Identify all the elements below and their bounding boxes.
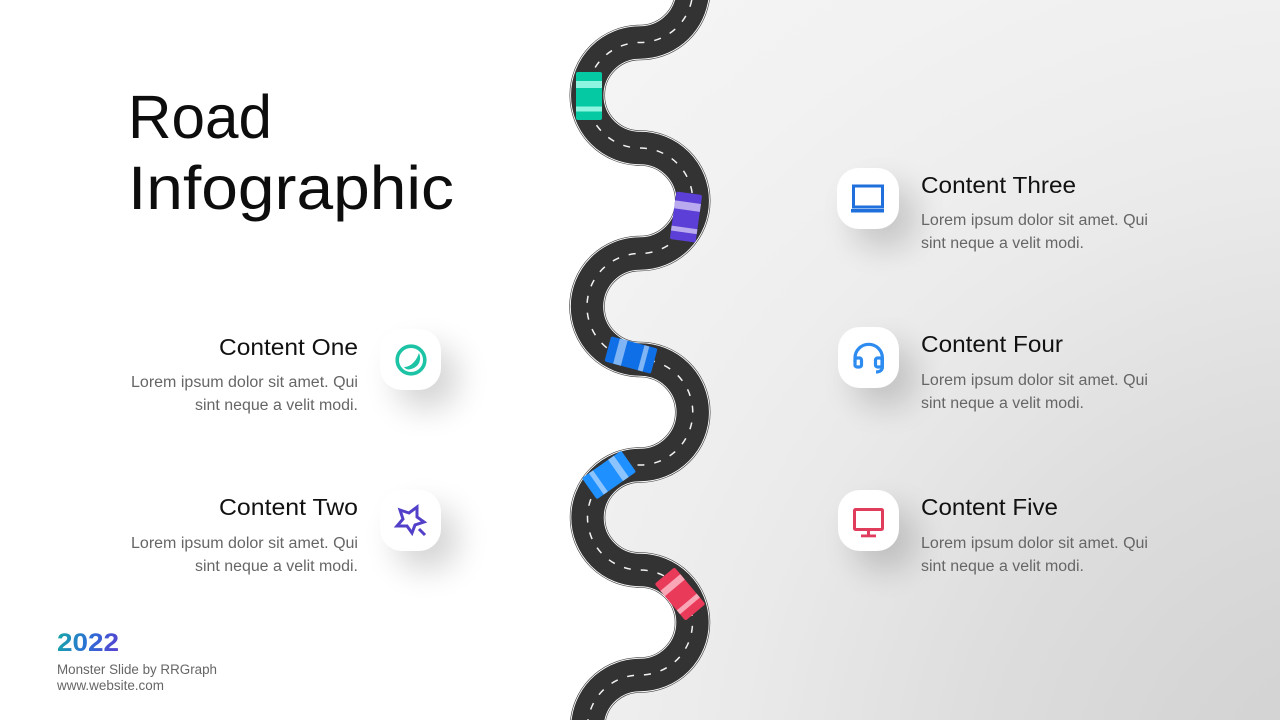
text: content three: sint neque a velit modi. [921,235,1084,252]
text: content four [921,372,1148,412]
road [587,0,693,720]
icon card: monitor [838,490,915,569]
heading: content four: Content Four [921,331,1063,357]
year: 2022 [57,629,119,657]
heading: content five: Content Five [921,494,1058,520]
text: content three [921,212,1148,252]
icon card: laptop [837,168,915,247]
text: content four: sint neque a velit modi. [921,395,1084,412]
icon card: star wand [380,490,457,569]
text: content one: sint neque a velit modi. [195,397,358,414]
text: content three: Lorem ipsum dolor sit amet. Qui [921,212,1148,229]
text: content two [131,535,358,575]
car: light blue [582,451,636,499]
text: content two: Lorem ipsum dolor sit amet. Qui [131,535,358,552]
panel: content two [131,490,457,575]
title: Road [128,83,272,151]
text: content five: Lorem ipsum dolor sit amet. Qui [921,535,1148,552]
footer [56,629,217,693]
car: teal [576,72,602,120]
title: Infographic [128,154,454,222]
website: www.website.com [56,678,164,693]
credit: Monster Slide by RRGraph [57,662,217,677]
heading: content three: Content Three [921,172,1076,198]
title [128,83,454,222]
text: content five [921,535,1148,575]
car: blue [604,336,658,374]
icon card: moon [380,329,457,408]
icon card: headset [838,327,915,406]
panel: content four [838,327,1148,412]
text: content four: Lorem ipsum dolor sit amet. Qui [921,372,1148,389]
car: purple [670,191,702,243]
text: content five: sint neque a velit modi. [921,558,1084,575]
text: content one: Lorem ipsum dolor sit amet. Qui [131,374,358,391]
text: content two: sint neque a velit modi. [195,558,358,575]
panel: content five [838,490,1148,575]
heading: content one: Content One [219,334,358,360]
background: grey gradient right of road [587,0,1280,720]
panel: content three [837,168,1148,252]
text: content one [131,374,358,414]
heading: content two: Content Two [219,494,358,520]
panel: content one [131,329,457,414]
car: red [655,567,705,621]
